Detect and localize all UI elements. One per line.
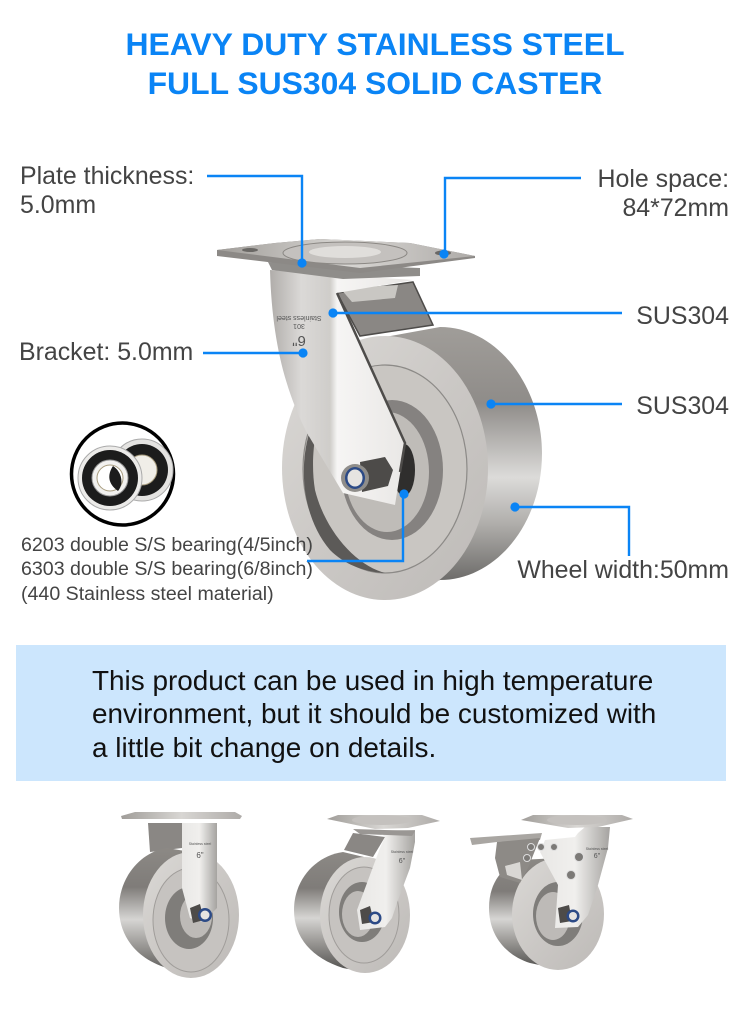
label: hole space <box>439 165 729 259</box>
label: bearing text: 6303 double S/S bearing(6/8inch) <box>21 558 313 580</box>
label: wheel SUS304 <box>486 392 729 420</box>
bracket <box>270 270 413 505</box>
caster variant: fixed: 6" <box>196 851 204 860</box>
panel: high temperature note: a little bit change on details. <box>92 732 436 763</box>
label: plate thickness <box>20 162 307 268</box>
label: hole space: Hole space: <box>598 165 729 193</box>
bracket engraving: Stainless steel <box>276 314 322 321</box>
label: bracket thickness: Bracket: 5.0mm <box>19 338 193 366</box>
icon: bearing inset <box>72 423 174 525</box>
caster variant: fixed: Stainless steel <box>189 842 212 846</box>
label: bracket thickness <box>19 338 308 366</box>
label: wheel width <box>510 502 729 584</box>
label: wheel width: Wheel width:50mm <box>517 556 729 584</box>
top plate <box>217 239 475 273</box>
bracket engraving: 6" <box>292 332 306 349</box>
caster variant: fixed <box>119 812 242 978</box>
caster variant: swivel: Stainless steel <box>391 850 414 854</box>
caster variant: swivel with brake <box>470 815 633 970</box>
label: bearing text <box>21 489 409 605</box>
axle nut <box>341 457 393 492</box>
caster variant: swivel: 6" <box>399 858 406 865</box>
caster variant: swivel with brake: 6" <box>594 853 601 860</box>
label: plate thickness: Plate thickness: <box>20 162 194 190</box>
main caster photo <box>217 239 542 600</box>
caster variant: swivel <box>294 815 440 973</box>
label: bracket SUS304: SUS304 <box>636 302 729 330</box>
bracket engraving <box>276 314 322 349</box>
title: HEAVY DUTY STAINLESS STEEL <box>125 26 625 62</box>
label: hole space: 84*72mm <box>622 194 729 222</box>
label: plate thickness: 5.0mm <box>20 191 96 219</box>
panel: high temperature note: This product can be used in high temperature <box>92 665 653 696</box>
label: bearing text: 6203 double S/S bearing(4/5inch) <box>21 534 313 556</box>
label: bracket SUS304 <box>328 302 729 330</box>
panel: high temperature note <box>16 645 726 781</box>
bracket engraving: 301 <box>293 322 305 329</box>
under-plate rim <box>268 262 420 279</box>
title: FULL SUS304 SOLID CASTER <box>148 65 602 101</box>
wheel face <box>282 336 488 600</box>
back support <box>337 282 433 336</box>
panel: high temperature note: environment, but it should be customized with <box>92 698 656 729</box>
label: wheel SUS304: SUS304 <box>636 392 729 420</box>
label: bearing text: (440 Stainless steel material) <box>21 583 274 605</box>
caster variant: swivel with brake: Stainless steel <box>586 847 609 851</box>
wheel tread <box>385 327 542 600</box>
title <box>125 26 625 101</box>
